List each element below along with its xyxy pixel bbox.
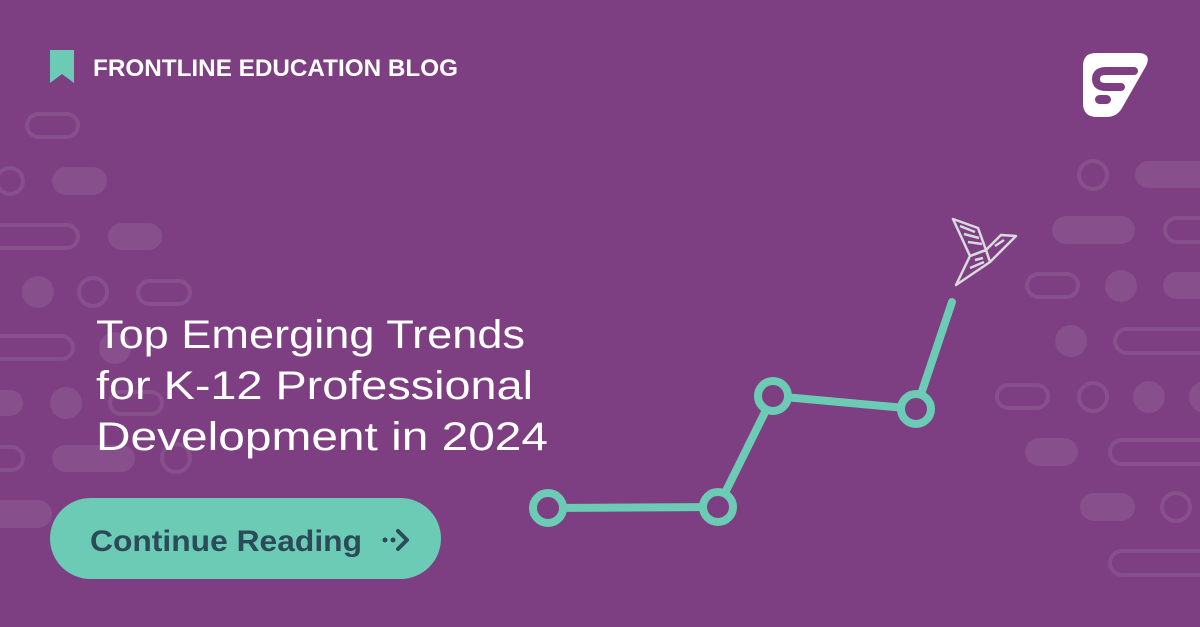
- button: continue reading: Continue Reading: [90, 525, 362, 558]
- icon: bookmark: [50, 50, 74, 83]
- logo: [1083, 53, 1148, 117]
- icon: arrow: [382, 531, 407, 549]
- button: continue reading: [50, 498, 441, 579]
- line chart: [533, 302, 952, 523]
- header: blog label: [50, 50, 458, 83]
- title: [96, 313, 548, 459]
- title: Development in 2024: [96, 415, 548, 459]
- blog name: FRONTLINE EDUCATION BLOG: [93, 55, 458, 82]
- title: Top Emerging Trends: [96, 313, 525, 357]
- icon: origami bird: [953, 219, 1016, 285]
- title: for K-12 Professional: [96, 364, 533, 408]
